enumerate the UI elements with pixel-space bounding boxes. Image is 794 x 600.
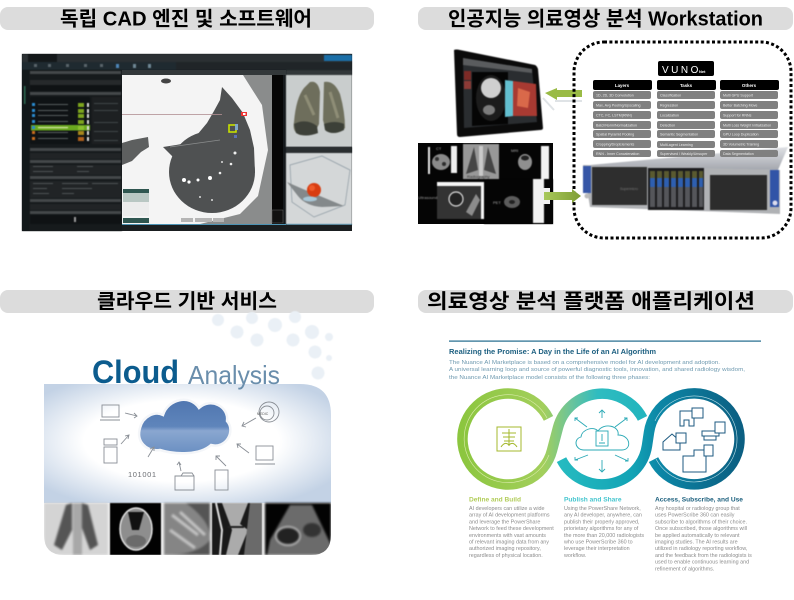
top toolbar (22, 54, 352, 70)
column: define and build: Define and Build (469, 496, 521, 504)
dotted workstation boundary (574, 42, 791, 238)
table: tasks column: Regression (660, 104, 678, 108)
left control panel (22, 70, 122, 231)
icon: blue facilities (663, 408, 725, 472)
table: others column: Support for RNNs (723, 114, 752, 118)
VUNO logo (658, 61, 714, 76)
table: layers column (593, 80, 652, 157)
3D lung rendering (286, 70, 352, 147)
CT scan view base (122, 75, 272, 224)
column: access, subscribe and use: Access, Subscribe, and Use (655, 496, 743, 504)
column: access, subscribe and use: Any hospital or radiology group that (655, 506, 740, 512)
binary data arrow (148, 447, 154, 457)
heading: medical imaging platform applications: 의료영상 분석 플랫폼 애플리케이션 (427, 290, 755, 313)
column: access, subscribe and use: utilized in radiology reporting workflow, (655, 546, 748, 552)
column: publish and share (563, 496, 644, 559)
column: publish and share: any AI developer, anywhere, can (564, 513, 642, 519)
column: publish and share: publish their properly approved, (564, 519, 640, 525)
heading: standalone CAD engine and software: 독립 CAD 엔진 및 소프트웨어 (60, 8, 312, 30)
column: publish and share: Publish and Share (564, 496, 622, 504)
column: access, subscribe and use: imaging studies. The AI results are (655, 540, 738, 546)
table: layers column: 1D, 2D, 3D Convolution (596, 94, 634, 98)
status bar (122, 225, 352, 231)
tablet sketch (215, 456, 228, 490)
column: define and build: of relevant imaging data from any (469, 540, 549, 546)
disc label: MEDIC (257, 412, 269, 416)
cloud analysis title: Cloud (92, 354, 179, 390)
table: layers column: BatchNorm/Normalization (596, 124, 637, 128)
mammogram (164, 503, 210, 555)
table: others column: Better Batching Move (723, 104, 757, 108)
arrow: medical images into workstation (540, 188, 581, 204)
medical image strip (44, 503, 331, 555)
table: others column: Others (742, 83, 757, 88)
column: define and build: AI developers can utilize a wide (469, 506, 545, 512)
binary data label: 101001 (128, 470, 157, 479)
ribbon: teal to blue loop (562, 393, 740, 484)
table: layers column: RNN - Inner Concatenation (596, 152, 639, 156)
table: others column: Data Segmentation (723, 152, 754, 156)
table: tasks column: Tasks (680, 83, 693, 88)
table: layers column: Cropping/DropElements (596, 142, 635, 146)
table: tasks column: Classification (660, 94, 681, 98)
VUNO logo: VUNO (662, 65, 701, 76)
ultrasound (265, 503, 331, 555)
icon: green x-ray (497, 427, 521, 451)
column: publish and share: workflow. (563, 553, 586, 559)
column: access, subscribe and use (655, 496, 752, 572)
cloud analysis title (92, 354, 280, 390)
column: access, subscribe and use: be applied automatically to relevant (655, 533, 740, 539)
panel: cloud analysis illustration (44, 311, 333, 555)
column: publish and share: the more than 20,000 radiologists (564, 533, 644, 539)
table: others column: Multi Loss Weight Initialization (723, 124, 771, 128)
table: tasks column (657, 80, 716, 157)
3D nodule view (286, 147, 352, 225)
tablet with cardiac imaging (454, 50, 543, 137)
PET image: PET (493, 200, 501, 205)
monitor sketch (237, 444, 275, 464)
table: tasks column: Detection (660, 124, 675, 128)
icon: teal cloud with arrows (575, 410, 629, 472)
column: define and build (469, 496, 554, 559)
cloud analysis title: Analysis (188, 360, 280, 390)
cloud icon (139, 400, 230, 453)
column: define and build: regardless of physical location. (469, 553, 543, 559)
panel: CAD software screenshot (22, 54, 352, 231)
CT image: CT (436, 146, 442, 151)
column: publish and share: leverage their interpretation (564, 546, 630, 552)
table: tasks column: Supervised / Weakly/Unsuper (660, 152, 708, 156)
panel: Nuance AI marketplace page (449, 340, 761, 572)
head CT (110, 503, 161, 555)
column: define and build: Network to feed these development (469, 526, 554, 532)
column: define and build: array of AI development platforms (469, 513, 550, 519)
laptop sketch (100, 405, 137, 420)
CT lung field (163, 87, 255, 213)
column: access, subscribe and use: refinement of algorithms. (655, 566, 714, 572)
column: access, subscribe and use: uses PowerScribe 360 can easily (655, 513, 735, 519)
table: layers column: Spatial Pyramid Pooling (596, 132, 634, 136)
server hardware (583, 147, 788, 214)
column: access, subscribe and use: subscribe to algorithms of their choice. (655, 519, 747, 525)
heading: AI medical imaging workstation: 인공지능 의료영상 분석 Workstation (448, 8, 763, 30)
column: define and build: and leverage the PowerShare (469, 519, 540, 525)
table: others column: 3D Volumetric Training (723, 142, 759, 146)
knee MRI (212, 503, 262, 555)
column: publish and share: Using the PowerShare Network, (564, 506, 641, 512)
panel: workstation diagram (418, 42, 791, 238)
table: layers column: Layers (615, 83, 630, 88)
ultrasound image: Ultrasound (418, 195, 437, 200)
device sketches with arrows (100, 402, 279, 490)
intro paragraph (449, 360, 745, 381)
column: define and build: authorized imaging repository, (469, 546, 541, 552)
table: others column (720, 80, 779, 157)
arrow: workstation output to tablet (543, 88, 582, 110)
medical image modalities collage (418, 143, 553, 224)
intro paragraph: The Nuance AI Marketplace is based on a comprehensive model for AI development and adoption. (449, 360, 720, 366)
column: access, subscribe and use: and the feedback from the radiologists is (655, 553, 752, 559)
intro paragraph: A universal learning loop and source of powerful diagnostic tools, innovation, and shared radiology wisdom, (449, 367, 745, 373)
decorative dots (212, 311, 333, 380)
column: publish and share: priorietary algorithms for any of (564, 526, 639, 532)
radiography image: Radiography (467, 174, 490, 179)
disc sketch (242, 402, 279, 427)
column: define and build: environments with vast amounts (469, 533, 546, 539)
document stack sketch (104, 435, 129, 463)
column: access, subscribe and use: Once subscribed, those algorithms will (655, 526, 747, 532)
intro paragraph: the Nuance AI Marketplace model consists of the following three phases: (449, 375, 650, 381)
table: layers column: CTC, FC, LSTM(RNN) (596, 114, 632, 118)
column: publish and share: who use PowerScribe 360 to (563, 540, 633, 546)
MRI image: MRI (511, 148, 518, 153)
table: tasks column: Semantic Segmentation (660, 132, 698, 136)
server hardware: Supermicro (620, 187, 638, 191)
folder sketch (175, 462, 194, 490)
heading: cloud based services: 클라우드 기반 서비스 (97, 290, 277, 313)
table: tasks column: Multi-agent Learning (660, 143, 693, 147)
table: tasks column: Localization (660, 114, 679, 118)
table: others column: GPU Loop Duplication (723, 132, 759, 136)
column: access, subscribe and use: used to enable continuous learning and (655, 560, 749, 566)
ribbon: green to teal loop (462, 394, 642, 485)
gradient panel background (44, 384, 331, 503)
table: others column: Multi GPU Support (723, 94, 753, 98)
VUNO logo: Net (699, 69, 706, 74)
table: layers column: Max, Avg Pooling/Upscaling (596, 104, 640, 108)
heading: cloud based services (0, 290, 374, 313)
heading: standalone CAD engine and software (0, 7, 374, 30)
chest x-ray (44, 503, 108, 555)
article title: Realizing the Promise: A Day in the Life of an AI Algorithm (449, 349, 656, 356)
CT vessels and nodule markers (122, 70, 286, 225)
